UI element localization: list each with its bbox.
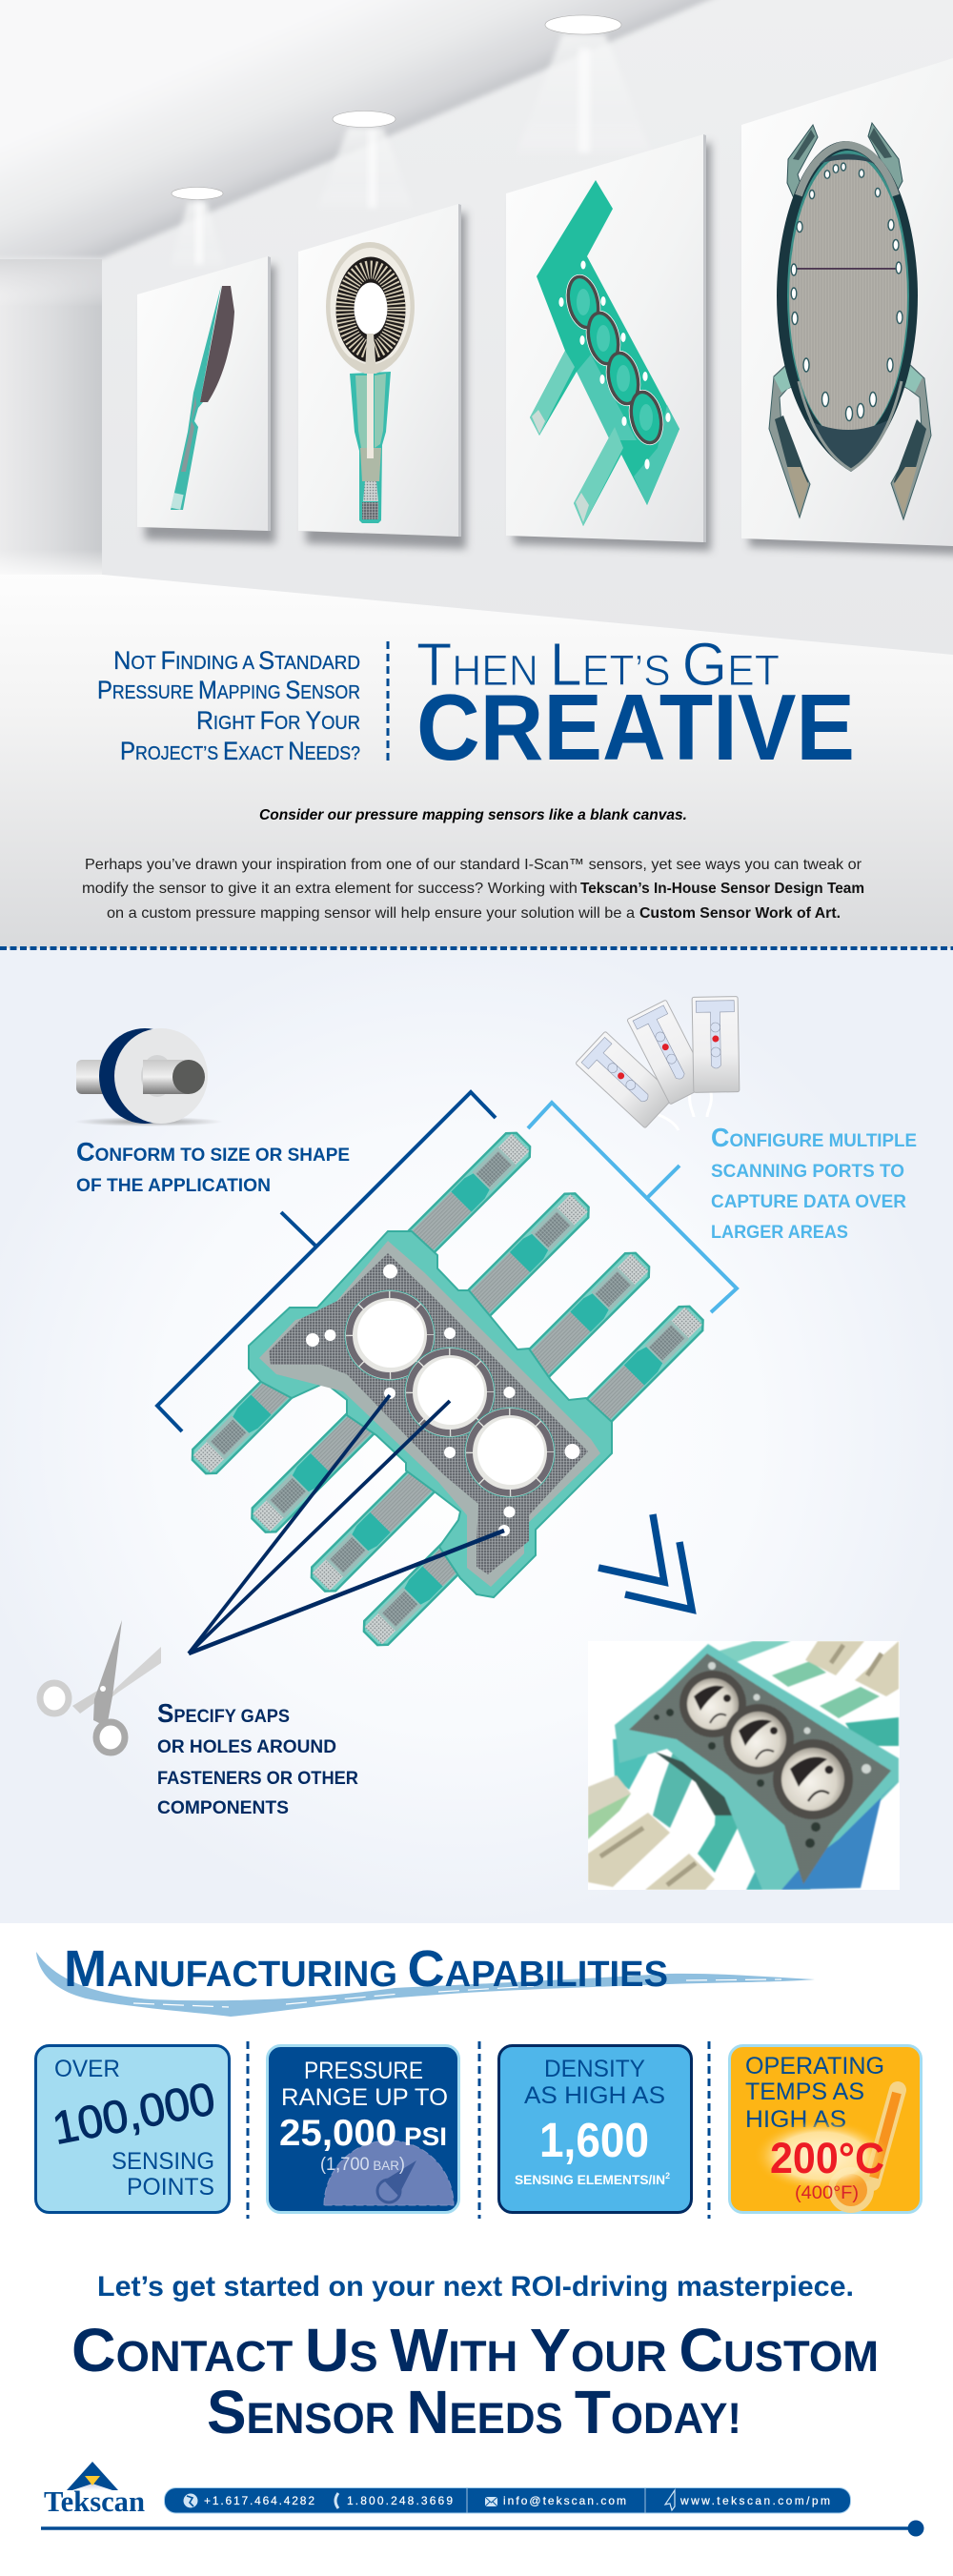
main headline: THEN LET’S GET — [416, 630, 780, 699]
contact bar — [164, 2487, 850, 2513]
text: conform to size or shape: OF THE APPLICATION — [76, 1175, 271, 1196]
icon: pressure gauge — [324, 2140, 454, 2205]
light streak 2 — [368, 130, 376, 208]
icon: shaft through disc — [74, 1028, 223, 1126]
stat card: pressure range: RANGE UP TO — [281, 2084, 448, 2111]
logo: Tekscan: Tekscan — [44, 2485, 145, 2518]
sensor ring 2 — [405, 1348, 495, 1437]
sensor ring 3 — [465, 1408, 555, 1497]
icon: envelope — [485, 2497, 497, 2506]
heading brush stroke — [36, 1952, 815, 2017]
icon: globe — [183, 2493, 198, 2508]
icon: three scanning handles — [576, 997, 740, 1130]
text: configure multiple scanning ports: CONFIGURE MULTIPLE — [711, 1123, 917, 1152]
icon: thermometer — [828, 2090, 898, 2213]
ceiling — [0, 0, 753, 258]
photo clips — [805, 1641, 864, 1675]
intro paragraph: Perhaps you’ve drawn your inspiration from one of our standard I-Scan™ sensors, yet see ways you can tweak or — [85, 857, 862, 873]
photo teal surround — [615, 1644, 899, 1890]
photo finger strips — [772, 1661, 826, 1687]
photo cylinder 3 — [773, 1739, 853, 1819]
left headline: not finding a standard sensor: PROJECT’S EXACT NEEDS? — [120, 737, 360, 765]
ceiling light 2 — [333, 111, 395, 128]
call to action subtitle: Let’s get started on your next ROI-driving masterpiece. — [97, 2271, 854, 2302]
sensor fingers lower left — [188, 1347, 491, 1650]
intro paragraph: Custom Sensor Work of Art. — [639, 905, 841, 922]
panel: custom sensor section background — [0, 948, 953, 1923]
contact bar: 1.800.248.3669 — [347, 2494, 453, 2507]
stat card: sensing density: 2 — [665, 2171, 670, 2180]
divider 1 — [246, 2041, 250, 2219]
text: conform to size or shape: CONFORM TO SIZE OR SHAPE — [76, 1137, 350, 1166]
text: configure multiple scanning ports: LARGER AREAS — [711, 1222, 848, 1243]
sensor: narrow blade — [171, 286, 234, 510]
intro paragraph: on a custom pressure mapping sensor will help ensure your solution will be a — [107, 905, 635, 922]
intro paragraph: modify the sensor to give it an extra element for success? Working with — [82, 881, 578, 897]
contact bar: www.tekscan.com/pm — [679, 2494, 830, 2507]
stat card: pressure range: 25,000 PSI — [279, 2113, 447, 2154]
divider 2 — [478, 2041, 480, 2219]
sensor ring 1 — [345, 1290, 435, 1380]
sensor translucent margin — [259, 1241, 600, 1587]
panel: canvas 2 with round sensor — [298, 204, 466, 549]
call to action headline: CONTACT US WITH YOUR CUSTOM — [71, 2316, 879, 2384]
panel: canvas 3 with four-ring sensor — [506, 134, 711, 551]
call to action headline: SENSOR NEEDS TODAY! — [207, 2378, 741, 2446]
stat card: sensing density: DENSITY — [544, 2056, 645, 2082]
stat card: operating temperature: (400°F) — [795, 2183, 859, 2203]
divider 3 — [707, 2041, 711, 2219]
panel: gallery room scene — [0, 0, 953, 948]
light cone 2 — [316, 128, 414, 212]
stat card: sensing points: OVER — [54, 2056, 120, 2082]
sensor holes — [306, 1264, 579, 1536]
stat card: sensing points: SENSING — [112, 2148, 214, 2175]
tagline: Consider our pressure mapping sensors like a blank canvas. — [259, 807, 687, 823]
sensor: round with stem — [326, 242, 415, 523]
light cone 3 — [515, 34, 653, 157]
icon: cursor — [665, 2490, 675, 2510]
text: configure multiple scanning ports: CAPTURE DATA OVER — [711, 1191, 906, 1212]
text: specify gaps or holes: OR HOLES AROUND — [157, 1736, 336, 1757]
frog body — [777, 141, 918, 472]
stat card: pressure range — [267, 2045, 459, 2213]
contact bar: +1.617.464.4282 — [204, 2494, 314, 2507]
frog legs — [769, 360, 810, 517]
photo cylinder 1 — [679, 1671, 746, 1737]
light cone 1 — [170, 202, 225, 269]
back column — [0, 259, 102, 575]
text: configure multiple scanning ports: SCANNING PORTS TO — [711, 1161, 904, 1182]
text: specify gaps or holes: COMPONENTS — [157, 1797, 289, 1818]
sensor: large oval with legs — [769, 123, 931, 519]
photo: real sensor on engine block — [588, 1641, 900, 1890]
vertical dashed divider — [387, 641, 389, 762]
sensor fingers upper right — [403, 1128, 708, 1433]
icon: phone — [335, 2493, 338, 2508]
stat card: operating temperature: 200°C — [770, 2134, 884, 2182]
contact bar: info@tekscan.com — [503, 2494, 626, 2507]
stat card: sensing density: AS HIGH AS — [524, 2082, 665, 2109]
photo mesh plate — [629, 1653, 891, 1884]
light streak 1 — [195, 202, 203, 264]
stat card: operating temperature: TEMPS AS — [745, 2079, 864, 2105]
left headline: not finding a standard sensor: NOT FINDING A STANDARD — [113, 646, 360, 675]
stat card: sensing density — [499, 2045, 692, 2213]
stat card: sensing points — [36, 2045, 229, 2213]
intro paragraph: Tekscan’s In-House Sensor Design Team — [580, 881, 864, 897]
text: specify gaps or holes — [157, 1698, 358, 1818]
callout lines: pointers from scissors to holes — [189, 1395, 504, 1653]
left headline: not finding a standard sensor: PRESSURE MAPPING SENSOR — [97, 676, 360, 704]
left headline: not finding a standard sensor: RIGHT FOR YOUR — [196, 706, 360, 735]
stat card: pressure range: (1,700 BAR) — [320, 2155, 405, 2175]
call to action headline — [71, 2316, 879, 2446]
light streak 3 — [578, 48, 590, 152]
stat card: sensing density: SENSING ELEMENTS/IN — [515, 2172, 668, 2187]
text: specify gaps or holes: FASTENERS OR OTHER — [157, 1768, 358, 1789]
text: configure multiple scanning ports — [711, 1123, 917, 1243]
left headline: not finding a standard sensor — [97, 646, 360, 765]
bracket: light blue ports bracket — [528, 1103, 737, 1312]
logo: Tekscan — [44, 2462, 145, 2518]
sensor: four-ring band — [530, 180, 679, 526]
intro paragraph — [82, 857, 864, 922]
big number 100,000: 100,000 — [49, 2074, 219, 2155]
stat card: sensing points: POINTS — [127, 2174, 214, 2201]
main headline: CREATIVE — [416, 675, 855, 780]
stat card: operating temperature: HIGH AS — [745, 2106, 846, 2133]
sensor: main custom engine head sensor — [188, 1128, 708, 1650]
photo engine gaps — [655, 1752, 739, 1815]
ceiling light 1 — [172, 187, 223, 200]
text: specify gaps or holes: SPECIFY GAPS — [157, 1698, 290, 1728]
photo blue casing — [781, 1788, 890, 1890]
panel: manufacturing capabilities white section — [0, 1923, 953, 2576]
sensor mesh — [269, 1253, 588, 1574]
dashed section border — [0, 946, 953, 950]
stat card: operating temperature: OPERATING — [745, 2053, 884, 2079]
stat card: sensing density: 1,600 — [539, 2113, 649, 2167]
panel: canvas 1 with blade sensor — [137, 256, 275, 543]
floor — [0, 575, 953, 948]
stat card: pressure range: PRESSURE — [304, 2058, 423, 2084]
arrow: double chevron to photo — [598, 1514, 692, 1610]
text: conform to size or shape — [76, 1137, 350, 1196]
footer rule with end dot — [41, 2520, 924, 2537]
heading: manufacturing capabilities: MANUFACTURING CAPABILITIES — [64, 1940, 668, 1998]
sensor body — [249, 1231, 612, 1597]
ceiling light 3 — [545, 15, 621, 34]
frog arms — [787, 125, 818, 198]
panel: canvas 4 with frog-shaped sensor — [741, 58, 953, 555]
stat card: operating temperature — [730, 2045, 921, 2213]
bracket: dark blue size bracket — [157, 1092, 496, 1431]
photo cylinder 2 — [723, 1704, 794, 1775]
icon: scissors — [40, 1620, 161, 1753]
main headline — [416, 630, 855, 780]
cables — [654, 1092, 711, 1130]
